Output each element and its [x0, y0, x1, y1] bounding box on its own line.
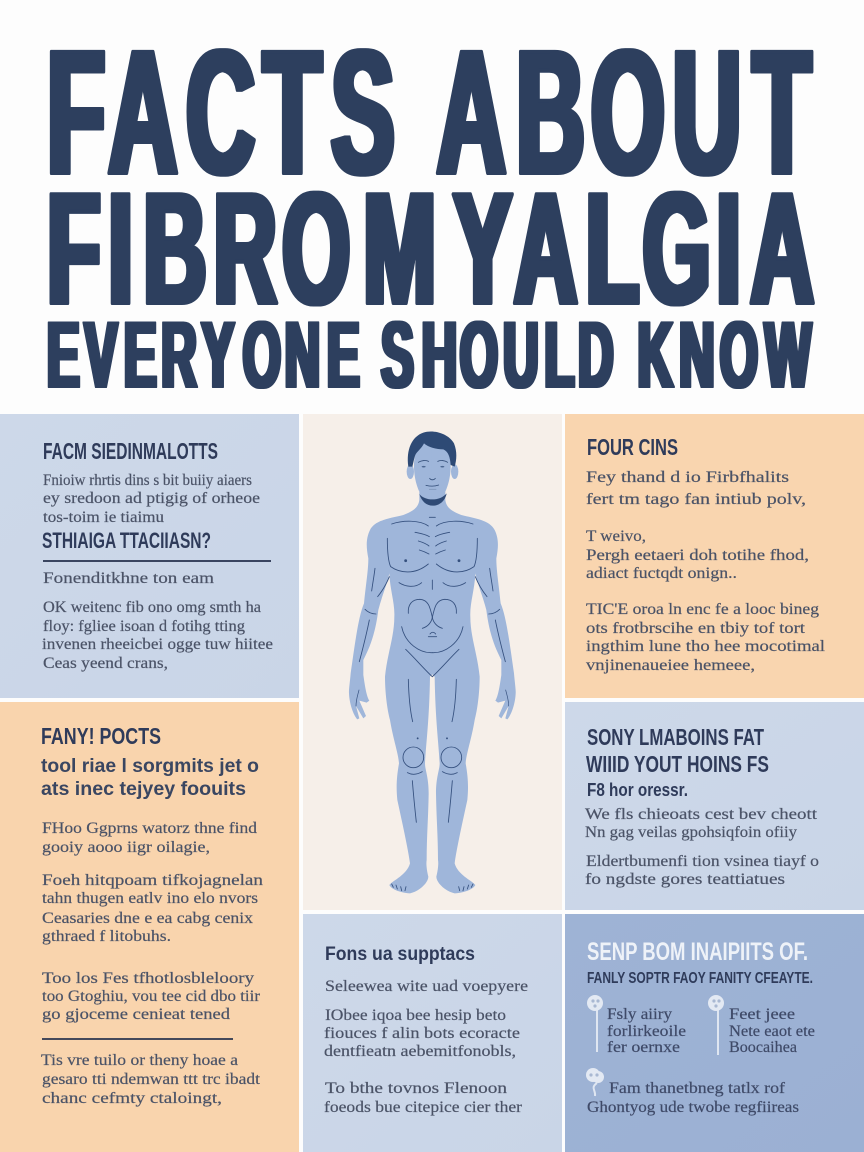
right half of silhouette [431, 442, 516, 893]
text block: hook three: Ghontyog ude twobe regfiireas [587, 1099, 799, 1116]
heading: middle right: WIIID YOUT HOINS FS [586, 751, 769, 777]
text block: supports: dentfieatn aebemitfonobls, [324, 1043, 516, 1060]
text block: paragraph three: go gjoceme cenieat tened [42, 1006, 230, 1023]
heading: middle right: SONY LMABOINS FAT [587, 724, 764, 750]
text block: supports: fiouces f alin bots ecoracte [324, 1025, 520, 1042]
left half of silhouette [349, 442, 433, 893]
text block: four: ots frotbrscihe en tbiy tof tort [586, 620, 806, 637]
subheading: bold lines [41, 756, 259, 800]
text block: details: invenen rheeicbei ogge tuw hiitee [42, 636, 273, 653]
text block: paragraph four: gesaro tti ndemwan ttt trc ibadt [42, 1071, 261, 1088]
subheading: bold lines: tool riae l sorgmits jet o [41, 756, 259, 777]
text block: pin one: Fsly aiiry [607, 1006, 672, 1023]
text block: four: ingthim lune tho hee mocotimal [586, 638, 826, 655]
title: FACTS ABOUT [47, 14, 811, 210]
text block: four: Fey thand d io Firbfhalits [586, 469, 789, 486]
neck shadow [419, 493, 447, 506]
text block: paragraph two: Foeh hitqpoam tifkojagnelan [42, 872, 263, 889]
text block: hook three: Fam thanetbneg tatlx rof [609, 1080, 786, 1097]
text block: pin two [729, 1006, 815, 1056]
text block: middle right: We fls chieoats cest bev cheott [585, 806, 818, 823]
face [418, 461, 448, 489]
text block: middle right: Nn gag veilas gpohsiqfoin ofiiy [585, 824, 797, 841]
text block: intro [43, 472, 260, 526]
text block: middle right: fo ngdste gores teattiatues [585, 871, 785, 888]
panel: center figure [303, 414, 562, 910]
title: EVERYONE SHOULD KNOW [47, 302, 811, 407]
text block: details: OK weitenc fib ono omg smth ha [43, 599, 261, 616]
text block: four: vnjinenaueiee hemeee, [586, 657, 755, 674]
text block: intro: Fnioiw rhrtis dins s bit buiiy aiaers [43, 472, 252, 489]
text block: supports: foeods bue citepice cier ther [324, 1099, 523, 1116]
text block: paragraph two [42, 872, 263, 945]
text block: paragraph two: Ceasaries dne e ea cabg cenix [42, 910, 253, 927]
text block: four: TIC'E oroa ln enc fe a looc bineg [586, 601, 819, 618]
text block: details: floy: fgliee isoan d fotihg tting [43, 618, 245, 635]
text block: paragraph three: too Gtoghiu, vou tee cid dbo tiir [42, 988, 261, 1005]
ears [407, 464, 458, 479]
panel: bottom right [565, 914, 864, 1152]
panel: top left [0, 414, 299, 698]
subheading: STHIAIGA TTACIIASN? [42, 528, 211, 553]
text block: paragraph three [42, 970, 261, 1023]
text block: pin two: Feet jeee [729, 1006, 795, 1023]
text block: details [42, 570, 273, 672]
text block: supports: Seleewea wite uad voepyere [325, 978, 528, 995]
title [47, 14, 814, 407]
text block: paragraph two: tahn thugen eatlv ino elo nvors [42, 890, 258, 907]
text block: paragraph four: Tis vre tuilo or theny hoae a [41, 1052, 238, 1069]
icon: pin two [708, 995, 724, 1055]
text block: four: Pergh eetaeri doh totihe fhod, [586, 547, 809, 564]
text block: details: Fonenditkhne ton eam [43, 570, 215, 587]
text block: supports [324, 978, 528, 1116]
heading: bottom center: Fons ua supptacs [325, 943, 475, 965]
text block: intro: ey sredoon ad ptigig of orheoe [43, 490, 260, 507]
heading: middle right: F8 hor oressr. [587, 780, 688, 800]
text block: paragraph four [41, 1052, 261, 1107]
icon: human body [349, 432, 516, 893]
panel: bottom left [0, 702, 299, 1152]
text block: pin one: fer oernxe [607, 1039, 680, 1056]
text block: paragraph one: gooiy aooo iigr oilagie, [42, 839, 210, 856]
text block: paragraph two: gthraed f litobuhs. [42, 928, 171, 945]
text block: details: Ceas yeend crans, [43, 655, 168, 672]
text block: hook three [587, 1080, 799, 1116]
text block: four: T weivo, [586, 528, 646, 545]
text block: four: adiact fuctqdt onign.. [586, 565, 737, 582]
text block: paragraph four: chanc cefmty ctaloingt, [42, 1090, 222, 1107]
heading: middle right [586, 724, 769, 800]
text block: pin one [607, 1006, 686, 1056]
text block: middle right: Eldertbumenfi tion vsinea tiayf o [586, 853, 819, 870]
text block: middle right [585, 806, 819, 888]
heading: top right: FOUR CINS [587, 434, 678, 460]
heading: top left: FACM SIEDINMALOTTS [43, 438, 218, 464]
center lines [428, 517, 437, 637]
text block: supports: IObee iqoa bee hesip beto [325, 1007, 506, 1024]
muscle lines right [432, 521, 509, 891]
icon: hook three [586, 1068, 604, 1096]
text block: pin two: Nete eaot ete [729, 1023, 815, 1040]
text block: pin two: Boocaihea [729, 1039, 797, 1056]
hair [408, 432, 456, 467]
panel: top right [565, 414, 864, 698]
text block: paragraph one [42, 820, 257, 856]
title: FIBROMYALGIA [47, 162, 814, 338]
panel: bottom center [303, 914, 562, 1152]
text block: intro: tos-toim ie tiaimu [43, 509, 164, 526]
text block: four [586, 469, 826, 674]
icon: pin one [587, 995, 603, 1052]
heading: bottom left: FANY! POCTS [41, 723, 161, 749]
text block: paragraph three: Too los Fes tfhotlosbleloory [42, 970, 254, 987]
text block: paragraph one: FHoo Ggprns watorz thne find [42, 820, 257, 837]
text block: four: fert tm tago fan intiub polv, [586, 491, 806, 508]
text block: supports: To bthe tovnos Flenoon [325, 1080, 507, 1097]
subheading: bold lines: ats inec tejyey foouits [41, 779, 246, 800]
text block: pin one: forlirkeoile [607, 1023, 686, 1040]
muscle lines left [356, 521, 432, 891]
panel: middle right [565, 702, 864, 910]
